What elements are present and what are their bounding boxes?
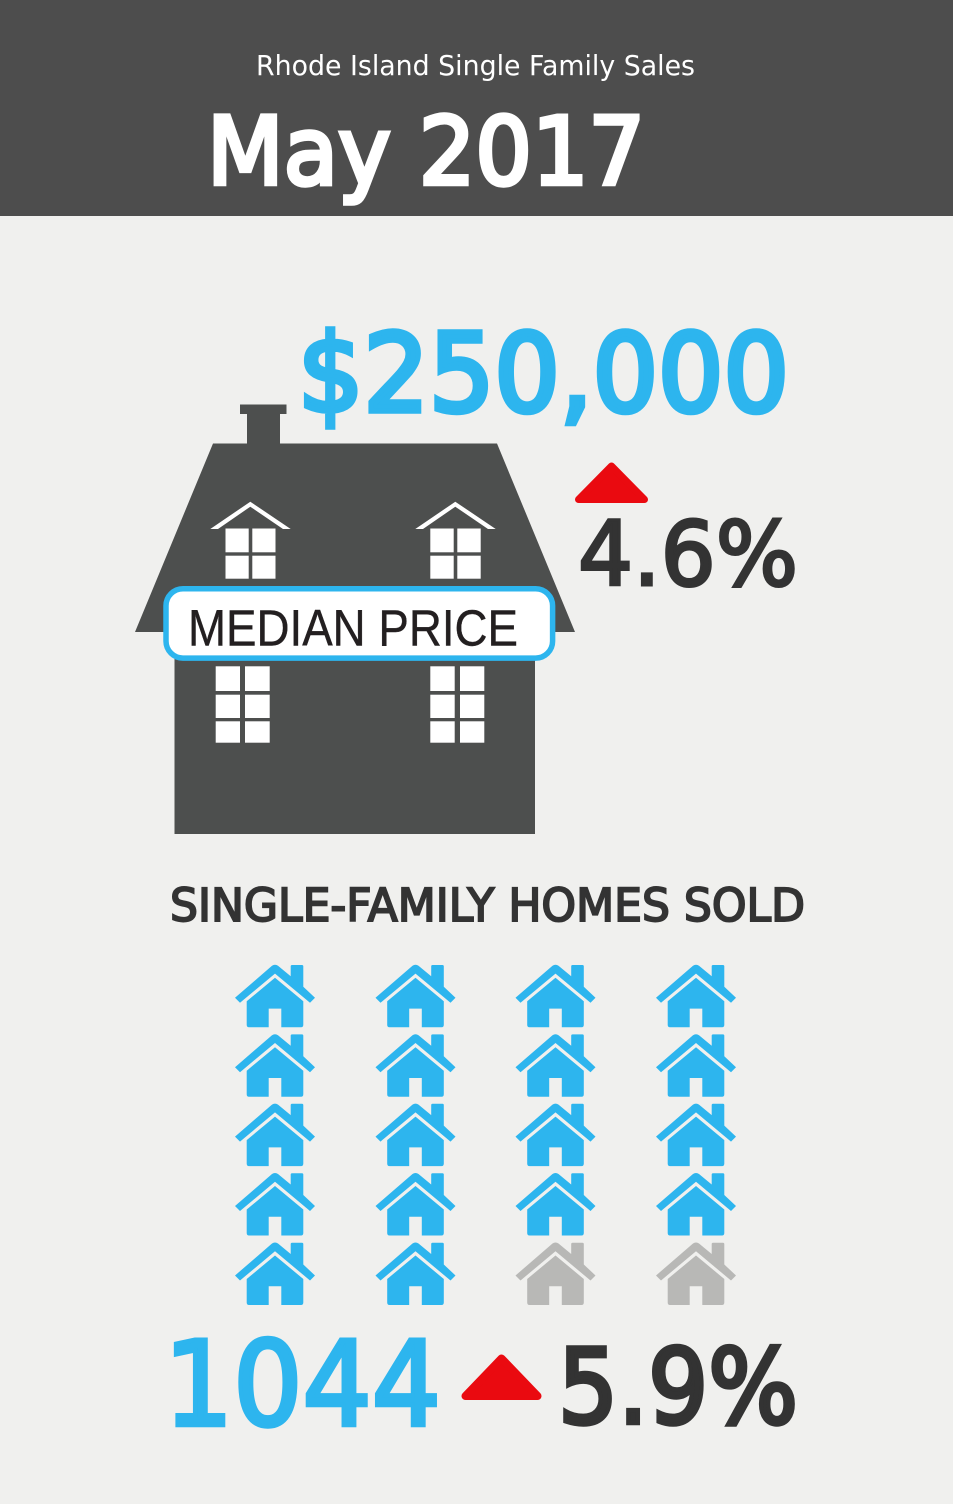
icon grid: houses xyxy=(235,965,736,1305)
icon: house row 3 col 4 xyxy=(656,1104,736,1166)
icon: grey house row 5 col 3 xyxy=(516,1242,596,1305)
icon: house row 4 col 1 xyxy=(235,1173,315,1236)
median price value: $250,000 xyxy=(298,312,789,437)
upper right dormer window xyxy=(415,502,496,579)
header band xyxy=(0,0,953,216)
icon: grey house row 5 col 4 xyxy=(656,1242,736,1305)
arrow: sales up xyxy=(466,1358,538,1396)
icon: house row 5 col 2 xyxy=(376,1242,456,1305)
price change percent: 4.6% xyxy=(578,502,798,606)
sales change percent: 5.9% xyxy=(558,1328,798,1448)
icon: house row 3 col 2 xyxy=(376,1104,456,1166)
icon: house row 2 col 4 xyxy=(656,1034,736,1097)
icon: house row 5 col 1 xyxy=(235,1242,315,1305)
heading: homes sold: SINGLE-FAMILY HOMES SOLD xyxy=(170,879,805,932)
upper left dormer window xyxy=(210,502,291,579)
icon: house row 3 col 1 xyxy=(235,1104,315,1166)
subtitle: Rhode Island Single Family Sales xyxy=(256,49,695,82)
icon: house row 4 col 3 xyxy=(516,1173,596,1236)
median price label: MEDIAN PRICE xyxy=(188,600,518,656)
icon: house row 2 col 3 xyxy=(516,1034,596,1097)
icon: house row 3 col 3 xyxy=(516,1104,596,1166)
icon: house row 1 col 4 xyxy=(656,965,736,1027)
icon: house row 4 col 4 xyxy=(656,1173,736,1236)
title: May 2017 xyxy=(207,98,645,207)
icon: house row 2 col 1 xyxy=(235,1034,315,1097)
lower left window xyxy=(216,666,270,743)
lower right window xyxy=(430,666,484,743)
icon: house row 2 col 2 xyxy=(376,1034,456,1097)
homes sold value: 1044 xyxy=(164,1316,441,1453)
house silhouette xyxy=(135,404,575,834)
illustration: large house xyxy=(135,404,575,834)
icon: house row 1 col 1 xyxy=(235,965,315,1027)
icon: house row 4 col 2 xyxy=(376,1173,456,1236)
icon: house row 1 col 2 xyxy=(376,965,456,1027)
icon: house row 1 col 3 xyxy=(516,965,596,1027)
arrow: price up xyxy=(578,466,644,500)
